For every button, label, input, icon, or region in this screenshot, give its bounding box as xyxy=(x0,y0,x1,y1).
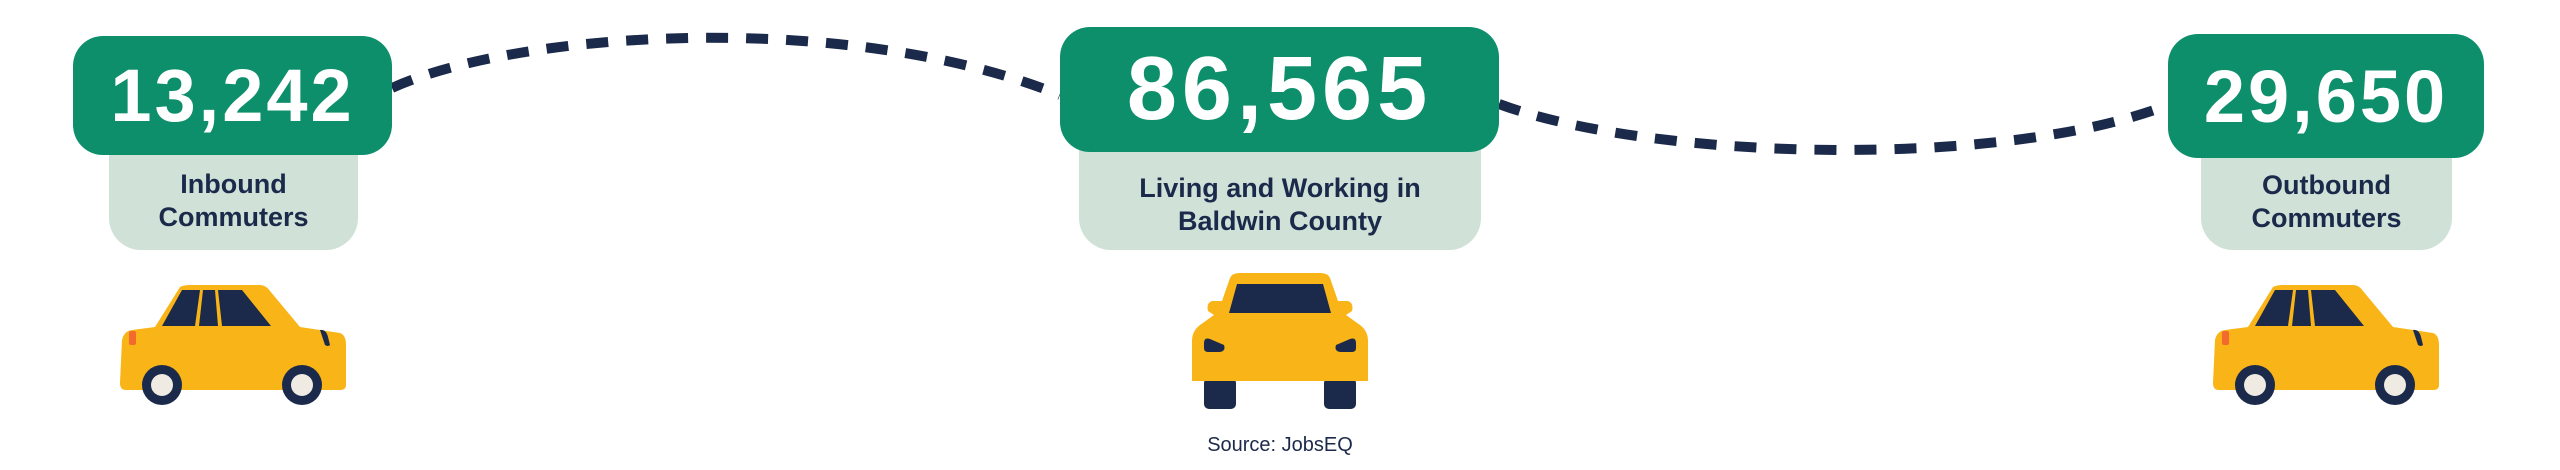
label box outbound xyxy=(2201,149,2452,250)
number inbound xyxy=(73,36,392,155)
panel: inbound xyxy=(73,36,392,250)
source text: Source: JobsEQ xyxy=(1207,434,1353,456)
label box inbound: Commuters xyxy=(158,202,309,232)
number center: 86,565 xyxy=(1127,39,1432,139)
panel: living and working xyxy=(1060,27,1499,250)
number center xyxy=(1060,27,1499,152)
number outbound xyxy=(2168,34,2484,158)
label box outbound: Outbound xyxy=(2262,170,2391,200)
label box center: Baldwin County xyxy=(1178,206,1382,236)
label box inbound xyxy=(109,148,358,250)
number outbound: 29,650 xyxy=(2204,54,2448,138)
icon: car front center xyxy=(1192,273,1368,409)
icon: car left xyxy=(120,285,346,405)
label box center: Living and Working in xyxy=(1139,173,1421,203)
number inbound: 13,242 xyxy=(110,54,355,137)
label box outbound: Commuters xyxy=(2251,203,2402,233)
label box center xyxy=(1079,147,1481,250)
label box inbound: Inbound xyxy=(180,169,287,199)
panel: outbound xyxy=(2168,34,2484,250)
icon: car right xyxy=(2213,285,2439,405)
